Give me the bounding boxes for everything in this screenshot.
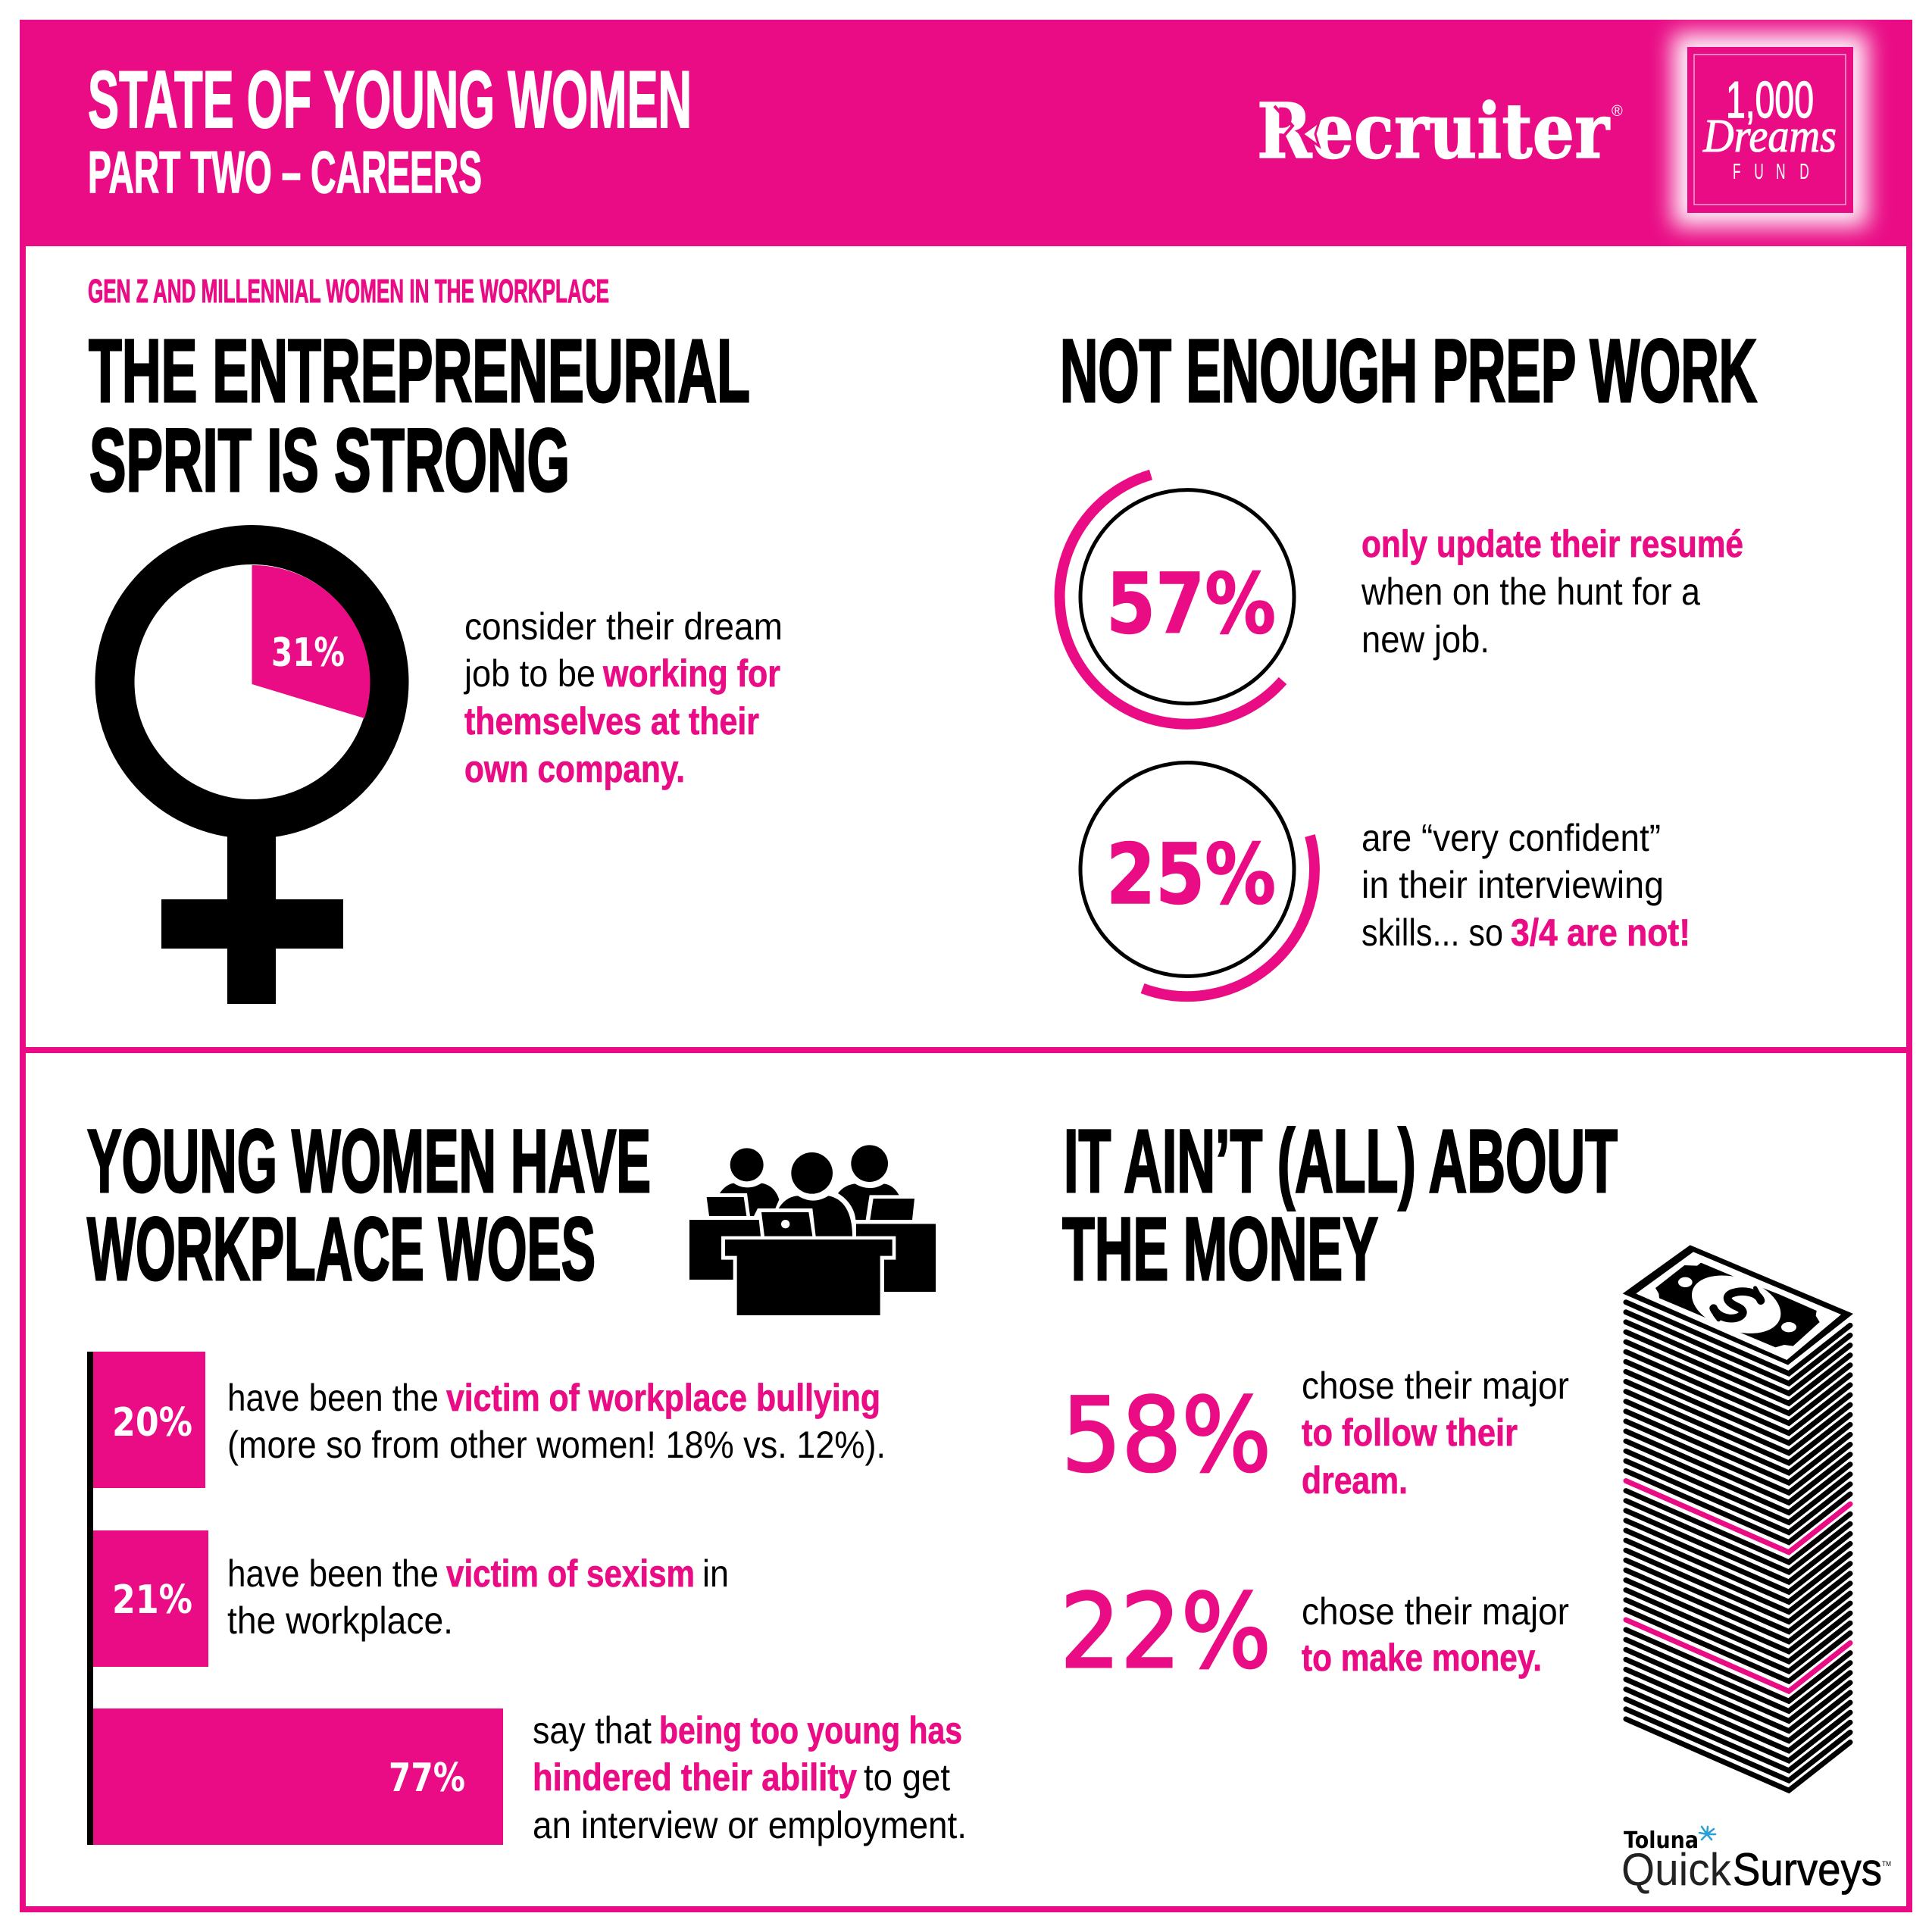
text: make money: chose their major	[1302, 1590, 1569, 1633]
logo: 1,000 Dreams Fund: FUND	[1733, 160, 1809, 184]
text: follow their dream: to follow their	[1302, 1411, 1518, 1454]
logo: Recruiter: Recruiter	[1257, 86, 1610, 176]
text: resume	[1361, 523, 1743, 661]
text: bullying: (more so from other women! 18% vs. 12%).	[227, 1424, 886, 1466]
text: sexism: the workplace.	[227, 1599, 453, 1642]
chart: venus symbol with 31% wedge	[115, 545, 389, 1004]
text: bullying: victim of workplace bullying	[446, 1377, 880, 1419]
bar chart: workplace woes	[87, 1352, 503, 1845]
text: interviewing: in their interviewing	[1361, 864, 1664, 906]
text: follow their dream	[1302, 1365, 1569, 1502]
logo: Toluna QuickSurveys: Quick	[1621, 1844, 1732, 1895]
text: resume: only update their resumé	[1361, 523, 1743, 565]
stat ring: 25%	[1080, 762, 1315, 996]
text: sexism: in	[702, 1552, 729, 1595]
heading: workplace woes: WORKPLACE WOES	[87, 1199, 596, 1299]
text: interviewing: skills... so	[1361, 911, 1503, 954]
logo: 1,000 Dreams Fund	[1673, 33, 1868, 227]
text: dream job: consider their dream	[464, 605, 783, 648]
bar: 77%: 77%	[389, 1755, 465, 1801]
stat: 58%: 58%	[1061, 1376, 1271, 1495]
logo: Toluna QuickSurveys: Surveys	[1733, 1844, 1882, 1895]
bar: 21%	[93, 1530, 208, 1667]
text: make money	[1302, 1590, 1569, 1679]
stat ring: 25%: 25%	[1106, 826, 1276, 923]
text: sexism: victim of sexism	[446, 1552, 695, 1595]
text: bullying: have been the	[227, 1377, 439, 1419]
text: sexism: have been the	[227, 1552, 439, 1595]
logo: 1,000 Dreams Fund: 1,000	[1726, 71, 1814, 129]
text: dream job: themselves at their	[464, 700, 759, 742]
bar: 20%: 20%	[112, 1400, 192, 1446]
heading: workplace woes	[87, 1111, 651, 1299]
text: dream job: working for	[602, 652, 780, 695]
text: interviewing: are “very confident”	[1361, 817, 1661, 859]
heading: the entrepreneurial spirit: SPRIT IS STRONG	[89, 411, 570, 511]
text: interviewing	[1361, 817, 1690, 954]
logo: Toluna QuickSurveys: Toluna	[1624, 1827, 1699, 1854]
icon: stack of money	[1623, 1245, 1853, 1790]
text: too young: hindered their ability	[533, 1756, 857, 1799]
text: bullying	[227, 1377, 886, 1466]
heading: about the money: THE MONEY	[1062, 1199, 1378, 1299]
text: follow their dream: dream.	[1302, 1459, 1408, 1502]
panel: header	[20, 20, 1912, 246]
bar: 77%	[93, 1708, 503, 1845]
logo: Recruiter: ®	[1612, 103, 1623, 120]
chart: venus symbol with 31% wedge: 31%	[271, 630, 345, 676]
icon: three people at desks	[689, 1145, 936, 1315]
stat ring: 57%	[1060, 475, 1294, 724]
subtitle: PART TWO – CAREERS	[88, 139, 482, 205]
text: interviewing: 3/4 are not!	[1511, 911, 1690, 954]
bar: 21%: 21%	[112, 1577, 192, 1623]
heading: workplace woes: YOUNG WOMEN HAVE	[87, 1111, 651, 1211]
text: too young: say that	[533, 1709, 652, 1752]
heading: about the money	[1062, 1111, 1618, 1299]
text: make money: to make money.	[1302, 1637, 1542, 1679]
section kicker: GEN Z AND MILLENNIAL WOMEN IN THE WORKPLACE	[88, 273, 609, 310]
stat: 22%: 22%	[1060, 1572, 1271, 1691]
text: dream job: own company.	[464, 748, 685, 790]
text: sexism	[227, 1552, 729, 1642]
text: too young	[533, 1709, 967, 1846]
text: too young: to get	[864, 1756, 950, 1799]
heading: the entrepreneurial spirit	[89, 321, 750, 511]
text: too young: an interview or employment.	[533, 1804, 967, 1846]
panel divider	[20, 1047, 1912, 1053]
text: resume: when on the hunt for a	[1361, 571, 1700, 613]
text: resume: new job.	[1361, 618, 1490, 661]
title: STATE OF YOUNG WOMEN	[88, 54, 692, 145]
text: follow their dream: chose their major	[1302, 1365, 1569, 1407]
logo: Toluna QuickSurveys: TM	[1882, 1860, 1891, 1868]
stat ring: 57%: 57%	[1106, 555, 1276, 652]
text: dream job	[463, 605, 783, 790]
heading: the entrepreneurial spirit: THE ENTREPRENEURIAL	[89, 321, 750, 421]
logo: 1,000 Dreams Fund: Dreams	[1702, 111, 1837, 162]
logo: Toluna QuickSurveys	[1621, 1827, 1891, 1895]
text: dream job: job to be	[463, 652, 596, 695]
text: too young: being too young has	[659, 1709, 962, 1752]
bar: 20%	[93, 1352, 205, 1488]
